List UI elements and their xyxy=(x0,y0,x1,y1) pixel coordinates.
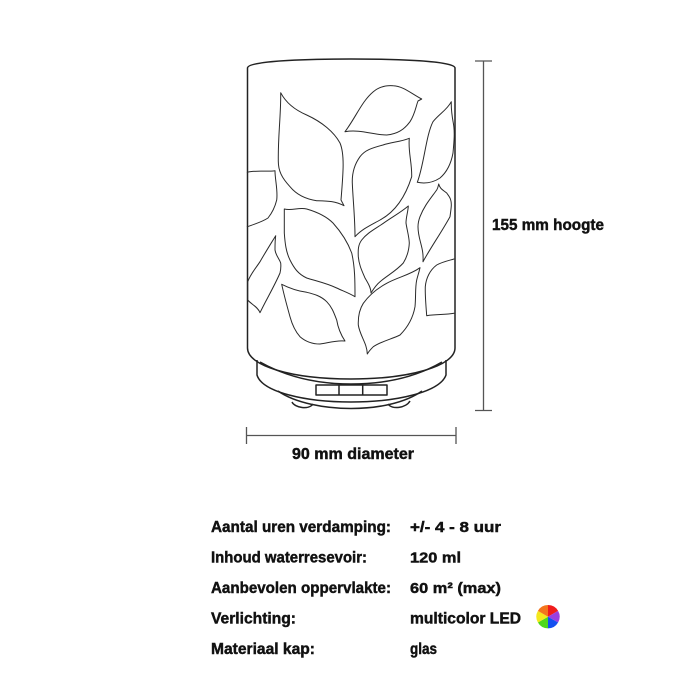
control panel buttons xyxy=(316,385,387,395)
icon: color wheel xyxy=(536,605,560,628)
spec row: water reservoir: 120 ml xyxy=(410,550,461,566)
spec row: lighting xyxy=(211,605,560,628)
illustration: diffuser xyxy=(247,59,455,408)
spec row: recommended surface xyxy=(211,580,501,597)
diffuser base and feet xyxy=(257,360,446,408)
spec row: evaporation hours xyxy=(211,519,501,536)
leaf pattern xyxy=(247,86,454,354)
spec row: water reservoir: Inhoud waterresevoir: xyxy=(211,550,367,566)
diffuser glass body xyxy=(248,59,455,379)
height label: 155 mm hoogte xyxy=(492,217,604,234)
diameter label: 90 mm diameter xyxy=(292,446,414,463)
spec row: shade material: Materiaal kap: xyxy=(211,641,315,658)
spec row: shade material: glas xyxy=(410,641,437,658)
spec row: recommended surface: Aanbevolen oppervlakte: xyxy=(211,580,391,597)
spec row: evaporation hours: Aantal uren verdamping: xyxy=(211,519,391,536)
diameter dimension line xyxy=(246,427,456,444)
spec row: shade material xyxy=(211,641,437,658)
spec row: lighting: Verlichting: xyxy=(211,610,296,628)
height dimension line xyxy=(475,61,492,410)
specification table xyxy=(211,519,560,658)
spec row: evaporation hours: +/- 4 - 8 uur xyxy=(410,519,501,536)
spec row: lighting: multicolor LED xyxy=(410,610,521,628)
spec row: recommended surface: 60 m² (max) xyxy=(410,580,501,597)
spec row: water reservoir xyxy=(211,550,461,566)
